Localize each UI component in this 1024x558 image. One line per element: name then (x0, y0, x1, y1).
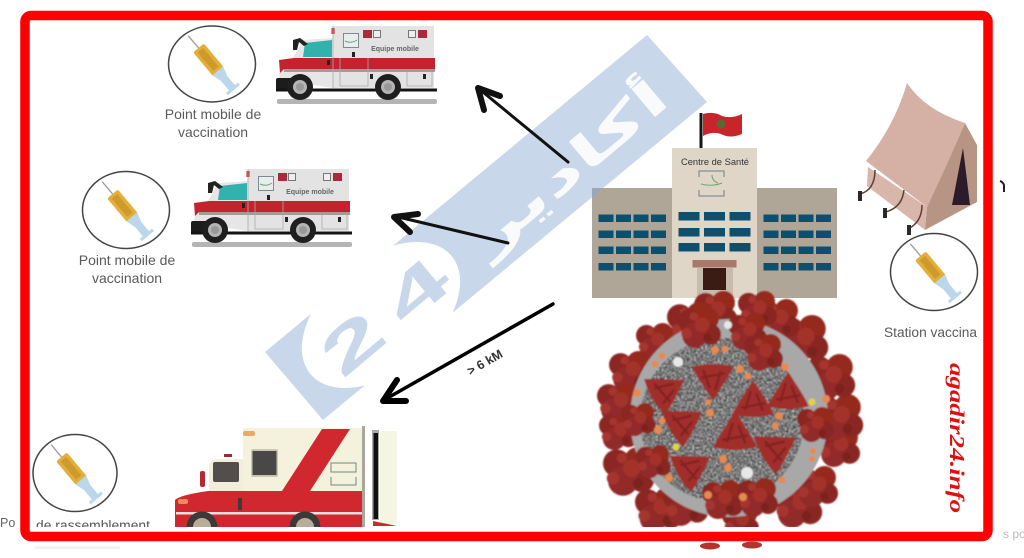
label: point mobile 2: Point mobile de (79, 252, 175, 268)
virus body grain (640, 338, 804, 502)
icon: ambulance 1: Equipe mobile (371, 46, 419, 53)
watermark arabic word: أكادير (454, 66, 680, 269)
icon: large ambulance (175, 426, 397, 527)
faint cropped caption (35, 546, 120, 549)
icon: syringe circle 4 (33, 434, 117, 512)
arrow to mobile point 1 (478, 88, 568, 162)
icon: syringe circle 3 (890, 234, 978, 310)
icon: ambulance 1 (276, 26, 437, 104)
icon: ambulance 2: Equipe mobile (286, 189, 334, 196)
outer spikes (597, 291, 863, 539)
watermark: agadir 24 band (265, 35, 707, 420)
flag (700, 113, 742, 148)
distance label: > 6 kM (465, 347, 505, 378)
central block (672, 148, 757, 298)
orange proteins (633, 346, 830, 501)
windows (598, 212, 831, 270)
cropped mark right (1000, 181, 1004, 192)
site credit: agadir24.info (945, 363, 969, 513)
building logo (699, 171, 724, 196)
arrow to mobile point 2 (394, 214, 508, 243)
right wing (757, 188, 837, 298)
yellow particles (672, 398, 816, 450)
label: station: Station vaccina (884, 325, 977, 340)
label: de rassemblement: de rassemblement (36, 518, 150, 533)
health centre building (592, 113, 837, 298)
left wing (592, 188, 672, 298)
cropped text left: Po (0, 516, 15, 530)
dimension bracket (458, 432, 462, 513)
mobile point 2 (79, 169, 352, 286)
station vaccination (884, 234, 978, 340)
arrow to gathering point (383, 304, 553, 401)
mobile point 1 (165, 26, 437, 140)
entrance door (692, 260, 736, 298)
clipped virus remnants under frame (700, 542, 762, 550)
watermark digit 4: 4 (369, 243, 464, 338)
white particles (673, 321, 753, 479)
tent (858, 83, 977, 235)
label: point mobile 2: vaccination (92, 270, 162, 286)
icon: syringe circle 1 (168, 26, 256, 102)
gathering point (32, 426, 397, 527)
coronavirus illustration (597, 291, 863, 539)
watermark digit 2: 2 (307, 297, 399, 390)
inner spikes (621, 307, 834, 519)
building title: Centre de Santé (681, 157, 749, 168)
icon: ambulance 2 (191, 169, 352, 247)
label: point mobile 1: vaccination (178, 124, 248, 140)
icon: syringe circle 2 (82, 172, 170, 248)
label: point mobile 1: Point mobile de (165, 106, 261, 122)
virus body light (630, 319, 828, 517)
